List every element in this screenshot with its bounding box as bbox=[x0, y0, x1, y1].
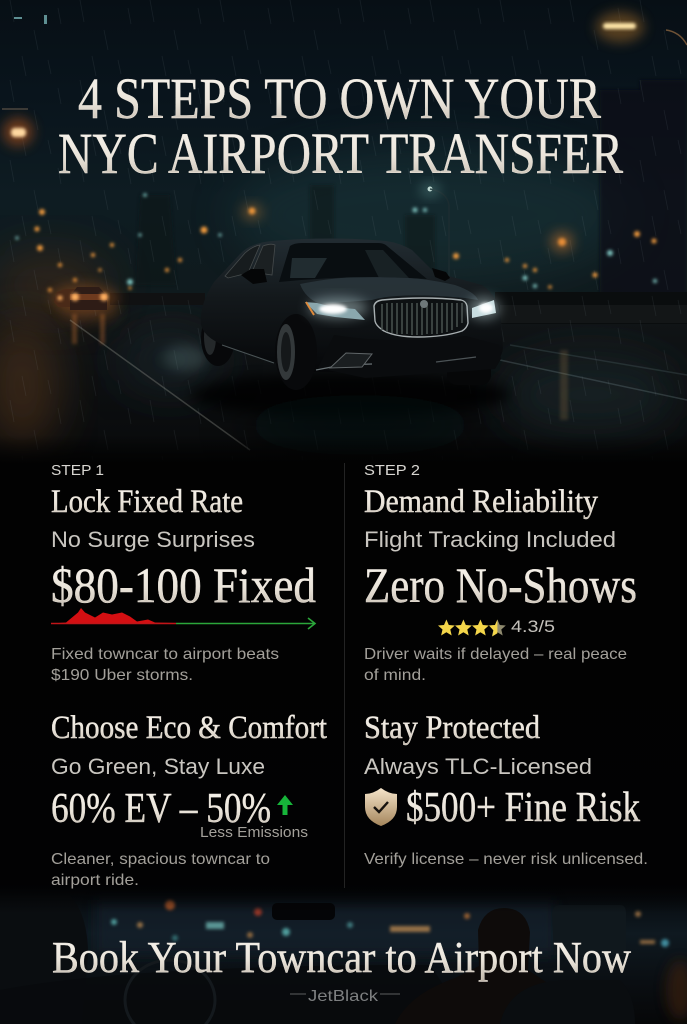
dashboard bbox=[0, 965, 470, 1024]
step 2 panel: Flight Tracking Included bbox=[364, 527, 616, 552]
step 4 panel: $500+ Fine Risk bbox=[406, 785, 640, 831]
step 2 panel: Demand Reliability bbox=[364, 484, 598, 520]
brand label bbox=[290, 988, 400, 1005]
interior cabin background bbox=[0, 885, 687, 1024]
step 2 panel: Driver waits if delayed – real peace bbox=[364, 646, 627, 663]
title bbox=[58, 66, 623, 186]
bumper bbox=[318, 335, 501, 378]
step 1 panel: $80-100 Fixed bbox=[51, 557, 316, 613]
call to action headline: Book Your Towncar to Airport Now bbox=[52, 933, 631, 982]
step 3 panel: Go Green, Stay Luxe bbox=[51, 754, 265, 779]
bonnet sheen bbox=[300, 276, 478, 304]
star rating bbox=[438, 617, 555, 636]
icon: green up arrow bbox=[277, 795, 293, 815]
step 3 panel: airport ride. bbox=[51, 872, 139, 889]
brand label: JetBlack bbox=[308, 988, 379, 1005]
step 1 panel: Lock Fixed Rate bbox=[51, 484, 243, 520]
step 2 panel: STEP 2 bbox=[364, 462, 420, 479]
steering wheel bbox=[125, 960, 215, 1024]
center divider bbox=[344, 463, 345, 888]
city lights bbox=[2, 12, 687, 292]
front wheel bbox=[275, 314, 317, 390]
distant car on the road bbox=[51, 284, 119, 312]
step 4 panel: Verify license – never risk unlicensed. bbox=[364, 851, 648, 868]
step 1 panel bbox=[51, 462, 316, 684]
side mirrors bbox=[241, 269, 267, 284]
step 3 panel: Cleaner, spacious towncar to bbox=[51, 851, 270, 868]
headlights bbox=[308, 298, 368, 318]
grille bbox=[374, 298, 468, 337]
right headrest bbox=[552, 905, 626, 955]
step 4 panel: Always TLC-Licensed bbox=[364, 754, 592, 779]
rear wheel bbox=[201, 310, 235, 366]
front right wheel bbox=[447, 355, 491, 385]
step 1 panel: No Surge Surprises bbox=[51, 527, 255, 552]
background: rainy night city and road bbox=[0, 0, 687, 470]
dark text panel bbox=[0, 435, 687, 913]
step 4 panel: Stay Protected bbox=[364, 710, 540, 746]
step 2 panel: Zero No-Shows bbox=[364, 557, 637, 613]
black towncar bbox=[163, 238, 510, 455]
step 2 panel bbox=[364, 462, 637, 684]
side door highlight bbox=[222, 345, 274, 363]
step 2 panel: of mind. bbox=[364, 667, 426, 684]
rearview mirror bbox=[272, 903, 335, 920]
passenger silhouette bbox=[395, 908, 568, 1024]
step 1 panel: Fixed towncar to airport beats bbox=[51, 646, 279, 663]
step 1 panel: STEP 1 bbox=[51, 462, 104, 479]
step 3 panel: 60% EV – 50% bbox=[51, 786, 271, 832]
step 3 panel bbox=[51, 710, 327, 889]
step 3 panel: Choose Eco & Comfort bbox=[51, 710, 327, 746]
step 3 panel: Less Emissions bbox=[200, 824, 308, 841]
left seat bbox=[0, 895, 88, 1024]
body bbox=[201, 238, 503, 372]
step 4 panel bbox=[364, 710, 648, 868]
icon: shield with check bbox=[365, 788, 397, 826]
side windows bbox=[225, 245, 260, 278]
step 1 panel: $190 Uber storms. bbox=[51, 667, 193, 684]
surge price chart bbox=[51, 608, 315, 629]
windshield bbox=[279, 243, 427, 282]
star rating: 4.3/5 bbox=[511, 617, 555, 636]
